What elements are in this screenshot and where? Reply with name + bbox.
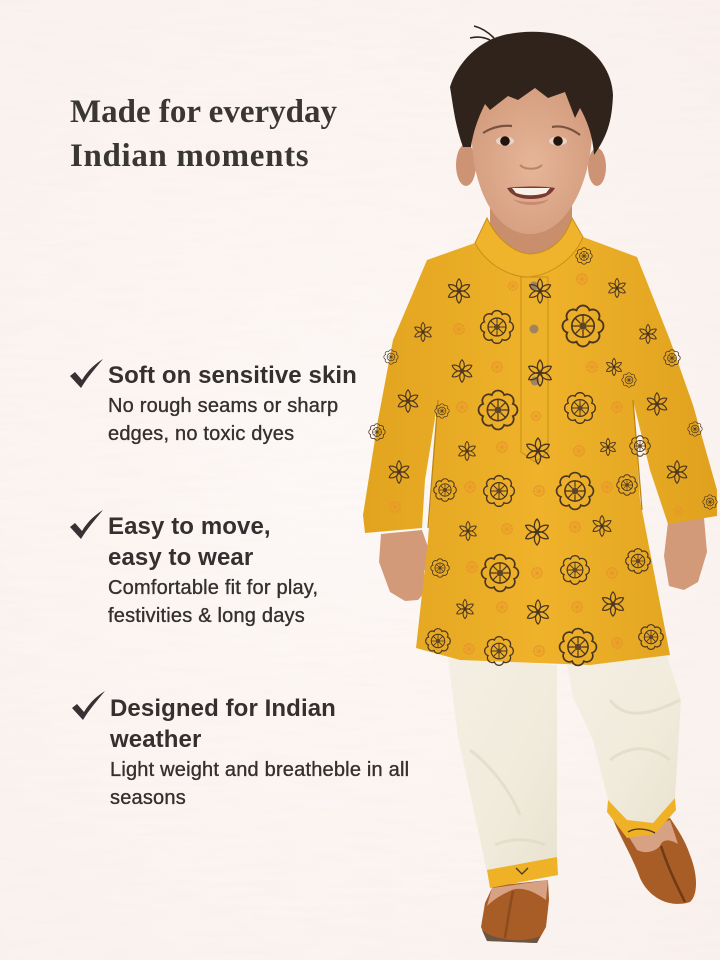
title [70, 94, 337, 174]
benefit 1 text: edges, no toxic dyes [108, 423, 294, 445]
benefit 2 heading: Easy to move, [108, 513, 271, 540]
benefit 3 heading: Designed for Indian [110, 695, 336, 722]
benefit 2 text: Comfortable fit for play, [108, 577, 318, 599]
benefit 1: soft on sensitive skin [108, 362, 357, 445]
benefit 3 text [110, 759, 409, 809]
icon: check mark 3 [72, 691, 105, 720]
benefit 2 heading [108, 513, 271, 571]
icon: check mark 2 [70, 510, 103, 539]
neck [490, 205, 572, 262]
title: Indian moments [70, 138, 309, 174]
benefit 3 text: seasons [110, 787, 186, 809]
kurta [363, 218, 717, 665]
head [450, 26, 613, 234]
benefit 3 heading [110, 695, 336, 753]
eyes [496, 136, 514, 146]
benefit 3 heading: weather [110, 726, 201, 753]
title: Made for everyday [70, 94, 337, 130]
benefit 3 text: Light weight and breatheble in all [110, 759, 409, 781]
benefit 2 text: festivities & long days [108, 605, 305, 627]
trouser cuffs [487, 857, 558, 888]
hair [450, 32, 613, 155]
print motifs [369, 248, 717, 665]
benefit 3: designed for Indian weather [110, 695, 409, 809]
benefit 1 heading: Soft on sensitive skin [108, 362, 357, 389]
benefit 1 text: No rough seams or sharp [108, 395, 338, 417]
mouth [507, 186, 555, 199]
benefit 1 text [108, 395, 338, 445]
benefit 2: easy to move [108, 513, 318, 627]
trousers [448, 650, 681, 888]
hands [379, 518, 707, 601]
benefit 2 heading: easy to wear [108, 544, 253, 571]
benefit 2 text [108, 577, 318, 627]
shoes [481, 805, 696, 943]
ears [456, 144, 476, 186]
icon: check mark 1 [70, 359, 103, 388]
